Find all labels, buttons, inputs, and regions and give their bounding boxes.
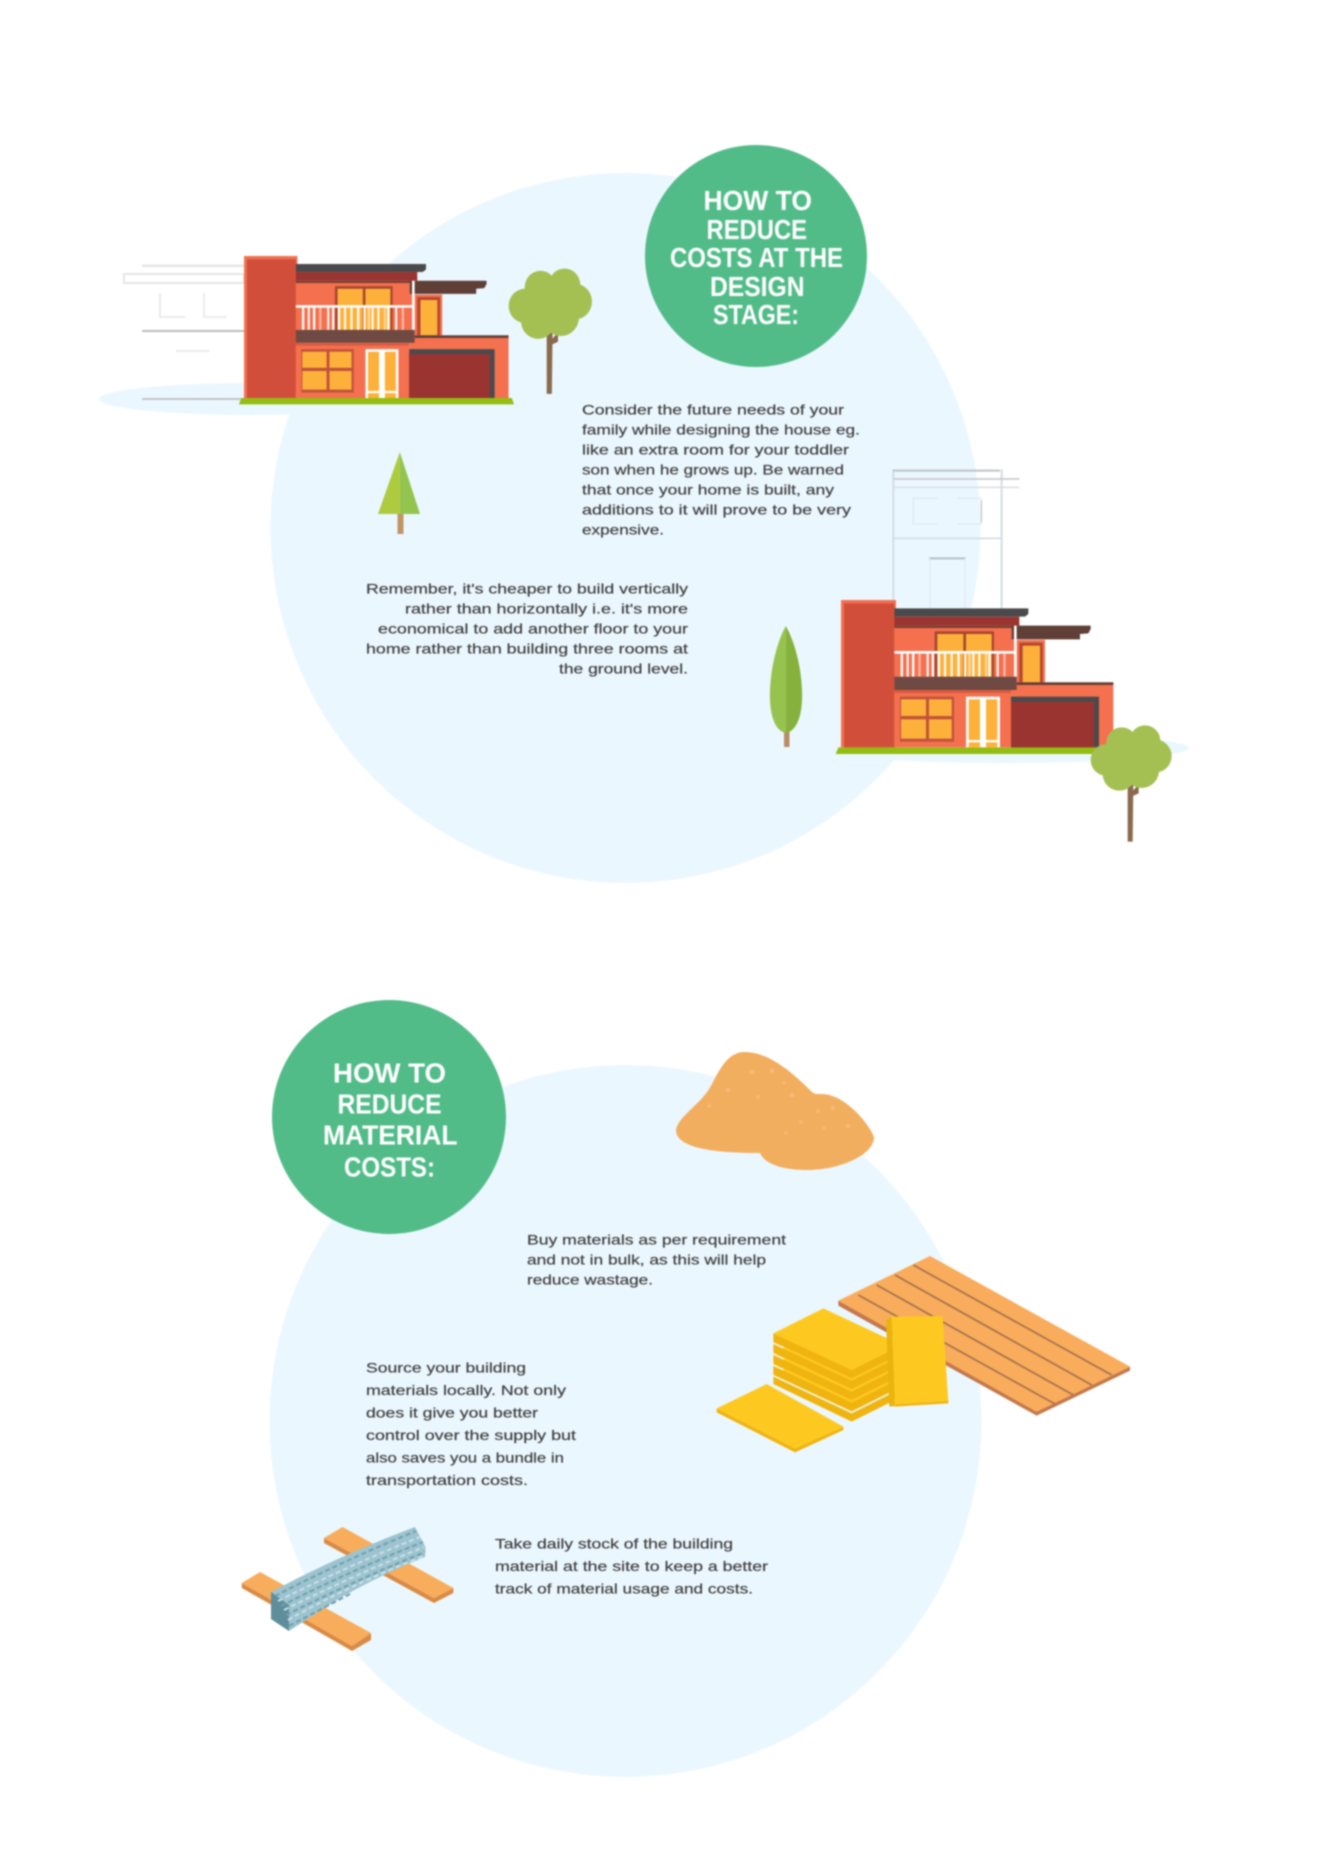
heading: how to reduce material costs: HOW TO bbox=[333, 1058, 446, 1088]
text block: take daily stock: track of material usage and costs. bbox=[495, 1580, 753, 1596]
icon: round tree near right house bbox=[1091, 725, 1172, 842]
text block: build vertically advice: home rather than building three rooms at bbox=[366, 640, 688, 656]
illustration: house with horizontal extension bbox=[239, 256, 514, 404]
text block: buy as per requirement: and not in bulk, as this will help bbox=[527, 1252, 766, 1268]
text block: build vertically advice: Remember, it's cheaper to build vertically bbox=[366, 580, 688, 596]
text block: future needs advice: like an extra room for your toddler bbox=[582, 442, 849, 458]
heading: how to reduce costs at the design stage: STAGE: bbox=[713, 299, 799, 330]
panel: material costs background circle bbox=[270, 1065, 982, 1777]
text block: source locally: materials locally. Not only bbox=[366, 1382, 566, 1398]
icon: wooden planks bbox=[838, 1256, 1130, 1416]
heading: how to reduce material costs: MATERIAL bbox=[323, 1120, 457, 1150]
text block: source locally: does it give you better bbox=[366, 1404, 538, 1420]
heading circle: design stage bbox=[645, 145, 867, 367]
ground shadow: left house bbox=[99, 383, 401, 415]
panel: design stage background circle bbox=[270, 173, 980, 883]
illustration: house with vertical extension bbox=[836, 600, 1119, 754]
sketch: ghost vertical extension outline bbox=[893, 469, 1019, 608]
sketch: ghost horizontal extension outline bbox=[124, 266, 244, 399]
icon: round tree near left house bbox=[509, 269, 592, 394]
text block: source locally: also saves you a bundle in bbox=[366, 1450, 564, 1466]
text block: take daily stock: Take daily stock of the building bbox=[495, 1536, 733, 1552]
text block: buy as per requirement: Buy materials as per requirement bbox=[527, 1232, 786, 1248]
text block: build vertically advice: economical to add another floor to your bbox=[378, 620, 688, 636]
text block: future needs advice: Consider the future needs of your bbox=[582, 402, 844, 418]
heading: how to reduce costs at the design stage: REDUCE bbox=[706, 214, 807, 245]
icon: steel rebar bundle on timber bbox=[242, 1527, 453, 1651]
text block: build vertically advice: rather than horizontally i.e. it's more bbox=[405, 600, 688, 616]
text block: build vertically advice: the ground level. bbox=[559, 660, 688, 676]
icon: pine tree bbox=[378, 452, 420, 534]
ground shadow: right house bbox=[817, 733, 1189, 763]
icon: sand pile bbox=[676, 1052, 874, 1170]
text block: buy as per requirement: reduce wastage. bbox=[527, 1272, 653, 1288]
heading: how to reduce material costs: COSTS: bbox=[344, 1152, 435, 1182]
text block: source locally: control over the supply but bbox=[366, 1427, 576, 1443]
text block: source locally: Source your building bbox=[366, 1360, 526, 1376]
text block: future needs advice: expensive. bbox=[582, 522, 664, 538]
text block: future needs advice: additions to it will prove to be very bbox=[582, 502, 851, 518]
text block: future needs advice: son when he grows up. Be warned bbox=[582, 462, 844, 478]
text block: source locally: transportation costs. bbox=[366, 1472, 528, 1488]
heading circle: material costs bbox=[272, 1000, 506, 1234]
heading: how to reduce costs at the design stage: DESIGN bbox=[710, 271, 804, 302]
text block: future needs advice: that once your home is built, any bbox=[582, 482, 834, 498]
text block: take daily stock: material at the site to keep a better bbox=[495, 1558, 768, 1574]
heading: how to reduce costs at the design stage: HOW TO bbox=[704, 185, 812, 216]
heading: how to reduce material costs: REDUCE bbox=[338, 1088, 442, 1120]
icon: stack of yellow boards bbox=[717, 1308, 948, 1452]
icon: cypress tree bbox=[770, 626, 802, 747]
heading: how to reduce costs at the design stage: COSTS AT THE bbox=[670, 242, 843, 273]
text block: future needs advice: family while designing the house eg. bbox=[582, 422, 860, 438]
